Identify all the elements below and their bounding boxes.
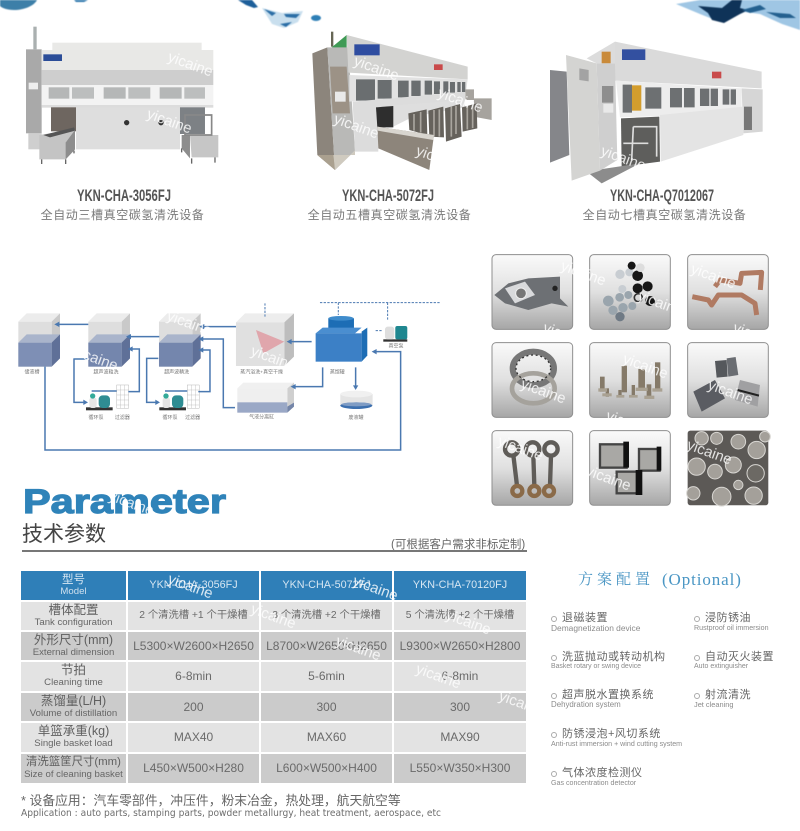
watermarks: yic [541,319,564,342]
row: external dimension: L9300×W2650×H2800 [400,639,520,653]
row: size of cleaning basket: Size of cleaning basket [24,769,123,780]
flow labels: 超声波粗洗 [94,368,118,375]
option: demagnetization: Demagnetization device [551,623,640,633]
part: die-cast housing [494,277,568,310]
row: size of cleaning basket: L450×W500×H280 [143,761,244,775]
watermarks: yic [414,142,437,165]
option: gas detector: 气体浓度检测仪 [562,767,642,779]
header row: YKN-CHA-70120FJ [413,579,507,591]
row: external dimension: External dimension [33,647,114,658]
flow labels: 循环泵 [163,414,177,421]
header row: 型号 [62,574,85,586]
model captions: YKN-CHA-5072FJ [342,187,434,205]
row: size of cleaning basket: L550×W350×H300 [410,761,510,775]
watermarks: yicaine [107,488,156,519]
watermarks: yicaine [584,463,633,494]
option: dehydration: 超声脱水置换系统 [562,689,654,701]
watermarks: yicaine [444,607,493,638]
caption: seven-tank machine: 全自动七槽真空碳氢清洗设备 [583,208,746,222]
row: volume of distillation: Volume of distillation [30,708,117,719]
option: auto extinguisher [694,650,774,670]
row: volume of distillation: 300 [450,700,470,714]
flow arrows [45,303,440,450]
tank: ultrasonic fine wash [159,313,201,367]
option: dehydration [551,688,654,709]
pump and filter group left [86,385,129,410]
watermarks: yicaine [414,661,463,692]
note: custom options: (可根据客户需求非标定制) [391,539,525,551]
row: external dimension: 外形尺寸(mm) [34,633,113,647]
part: hinges [693,357,760,412]
watermarks: yicaine [496,433,545,464]
model captions: YKN-CHA-Q7012067 [610,187,714,205]
row: tank configuration: 5 个清洗槽 +2 个干燥槽 [406,610,514,621]
option: dehydration: Dehydration system [551,700,621,709]
pump and filter group right [159,385,199,410]
flow labels: 蒸汽浴洗+真空干燥 [240,368,283,375]
row: tank configuration: Tank configuration [35,617,112,628]
option: anti-rust [551,728,682,748]
row: single basket load: MAX40 [174,730,213,744]
part: bearing [512,352,555,403]
watermarks: yicaine [352,53,401,84]
row: cleaning time: 6-8min [175,669,212,683]
watermarks: yicaine [519,376,568,407]
watermarks: yicaine [497,688,546,719]
option: jet cleaning: 射流清洗 [705,689,751,701]
optional heading: (Optional) [662,570,742,589]
row: cleaning time: 6-8min [442,669,478,683]
flow labels: 超声波精洗 [164,368,189,375]
watermarks: yicaine [436,85,485,116]
machine: YKN-CHA-Q7012067 [550,42,763,184]
tank: gas-liquid separator [237,383,294,413]
watermarks: yicaine [166,571,215,602]
flow labels: 储液槽 [25,368,39,375]
heading: technical parameters: 技术参数 [22,523,106,546]
watermarks: yicaine [599,143,648,174]
flow labels: 循环泵 [89,414,103,421]
heading: Parameter: Parameter [23,483,226,521]
process flow diagram [18,302,440,451]
option: gas detector: Gas concentration detector [551,779,636,787]
flow labels: 真空泵 [388,342,403,349]
caption: five-tank machine: 全自动五槽真空碳氢清洗设备 [308,208,471,222]
model captions [77,187,714,205]
row: tank configuration: 2 个清洗槽 +1 个干燥槽 [139,610,248,621]
watermarks: yicaine [165,308,214,339]
part: stamped discs on mesh [687,431,770,506]
header row: YKN-CHA-5072FJ [282,579,371,591]
caption: three-tank machine: 全自动三槽真空碳氢清洗设备 [41,208,204,222]
option: anti-rust: 防锈浸泡+风切系统 [562,728,661,740]
watermarks: yicaine [249,343,298,374]
watermarks: yicaine [145,106,194,137]
heading rule [22,550,527,552]
watermarks: yic [731,319,754,342]
row: volume of distillation: 200 [183,700,204,714]
watermarks: yicaine [621,351,670,382]
decorative water splashes along top edge [0,0,800,30]
watermarks: yicaine [706,377,755,408]
watermarks: yicaine [166,49,215,80]
row: external dimension [21,632,526,660]
tank: waste liquid [340,391,373,409]
row: single basket load: Single basket load [34,738,113,749]
option: auto extinguisher: 自动灭火装置 [705,651,774,663]
option: basket rotary [551,650,666,670]
option: basket rotary: Basket rotary or swing device [551,663,641,670]
row: volume of distillation: 300 [316,700,337,714]
row: single basket load: MAX60 [307,730,346,744]
flow labels: 蒸馏罐 [330,368,345,375]
optional list [551,612,774,787]
flow labels [25,342,403,421]
row: single basket load: 单篮承重(kg) [38,724,109,738]
watermarks: yicaine [249,601,298,632]
row: tank configuration: 槽体配置 [48,603,98,617]
model captions: YKN-CHA-3056FJ [77,187,171,205]
row: external dimension: L5300×W2600×H2650 [133,639,254,653]
header row: Model [60,586,87,597]
machine: YKN-CHA-3056FJ [26,26,218,164]
tank: vapor wash and vacuum dry [236,313,294,366]
arrowheads [54,322,377,405]
option: jet cleaning [694,688,751,709]
watermarks: yicaine [689,261,738,292]
watermarks: yicaine [351,573,400,604]
optional heading [578,570,742,589]
vacuum pump [383,326,407,342]
tank: distillation [316,316,367,362]
option: jet cleaning: Jet cleaning [694,700,733,709]
part: metal frames [600,442,661,495]
row: volume of distillation: 蒸馏量(L/H) [41,694,106,708]
row: size of cleaning basket: L600×W500×H400 [276,761,377,775]
watermarks: yic [604,407,627,430]
option: auto extinguisher: Auto extinguisher [694,663,748,670]
part: bolts [598,362,662,399]
row: cleaning time: 节拍 [61,663,86,677]
option: gas detector [551,766,642,787]
option: demagnetization: 退磁装置 [562,612,608,624]
part: connecting rods [505,442,558,496]
watermarks: yicaine [71,343,120,374]
watermarks: yicaine [685,437,734,468]
optional heading: 方案配置 [578,572,654,588]
option: anti-rust: Anti-rust immersion + wind cutting system [551,740,682,748]
application note chinese: * 设备应用：汽车零部件，冲压件，粉末冶金，热处理，航天航空等 [21,793,401,808]
option: rustproof oil [694,612,769,632]
header row [21,571,526,600]
tank: storage [18,313,60,367]
flow labels: 过滤器 [185,414,200,421]
option: demagnetization [551,612,640,633]
watermarks: yicaine [332,111,381,142]
option: rustproof oil: Rustproof oil immersion [694,624,769,632]
row: tank configuration: 3 个清洗槽 +2 个干燥槽 [272,610,381,621]
tank: ultrasonic rough wash [88,313,130,367]
watermarks: yicaine [334,633,383,664]
row: single basket load: MAX90 [440,730,480,744]
flow labels: 气液分离缸 [249,414,274,421]
flow labels: 废液罐 [348,414,363,421]
part: metal discs [603,262,655,321]
row: tank configuration [21,602,526,630]
header row: YKN-CHA-3056FJ [149,579,238,591]
option: rustproof oil: 浸防锈油 [705,612,751,624]
row: external dimension: L8700×W2650×H2650 [266,639,387,653]
option: basket rotary: 洗蓝抛动或转动机构 [562,651,666,663]
watermarks: yicaine [559,258,608,289]
machine: YKN-CHA-5072FJ [312,32,492,170]
row: cleaning time: Cleaning time [44,677,103,688]
application note english: Application : auto parts, stamping parts, powder metallurgy, heat treatment, aerospace, etc [21,808,441,819]
row: cleaning time: 5-6min [308,669,345,683]
gallery of cleaned parts [492,254,771,506]
flow labels: 过滤器 [115,414,130,421]
row: size of cleaning basket: 清洗篮筐尺寸(mm) [26,756,121,768]
watermarks: yicaine [636,288,685,319]
part: copper bus bars [692,272,762,315]
